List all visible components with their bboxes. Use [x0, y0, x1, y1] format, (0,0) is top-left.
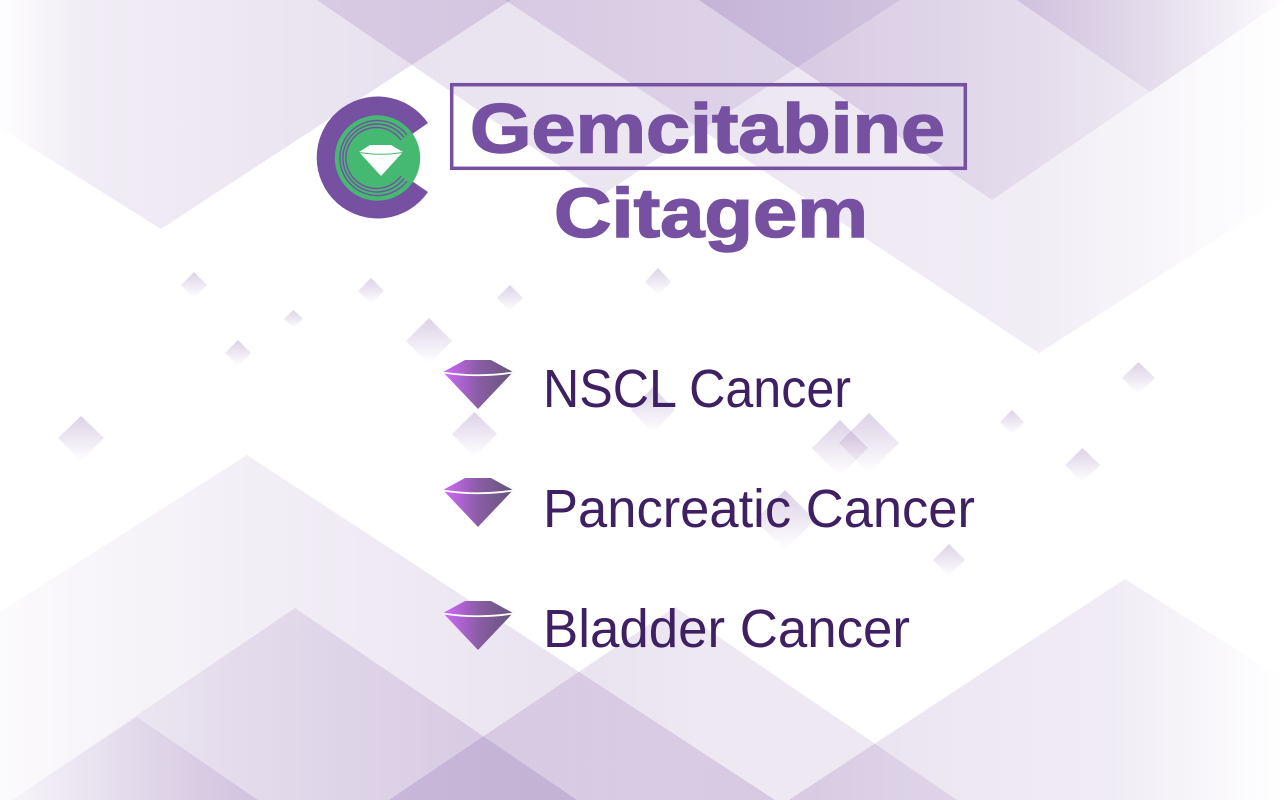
logo: white diamond	[359, 145, 403, 176]
logo: purple letter C	[317, 97, 428, 218]
logo: concentric rings	[340, 121, 407, 196]
background: top chevrons	[0, 0, 1284, 353]
icon: purple gem	[443, 478, 513, 527]
list item: Pancreatic Cancer	[443, 478, 975, 539]
background: bottom chevrons	[0, 455, 1284, 800]
logo: Citagem C mark	[317, 97, 428, 218]
label: Pancreatic Cancer: Pancreatic Cancer	[543, 479, 975, 539]
title box	[452, 85, 965, 168]
list item: Bladder Cancer	[443, 599, 910, 659]
icon: purple gem	[443, 601, 513, 650]
title: Gemcitabine: Gemcitabine	[470, 90, 945, 168]
icon: purple gem	[443, 360, 513, 409]
logo: green disc	[335, 115, 420, 201]
label: Bladder Cancer: Bladder Cancer	[543, 599, 910, 659]
list item: NSCL Cancer	[443, 359, 851, 419]
background: scattered small diamonds	[58, 268, 1155, 576]
subtitle: Citagem: Citagem	[554, 174, 868, 252]
label: NSCL Cancer: NSCL Cancer	[543, 359, 851, 419]
